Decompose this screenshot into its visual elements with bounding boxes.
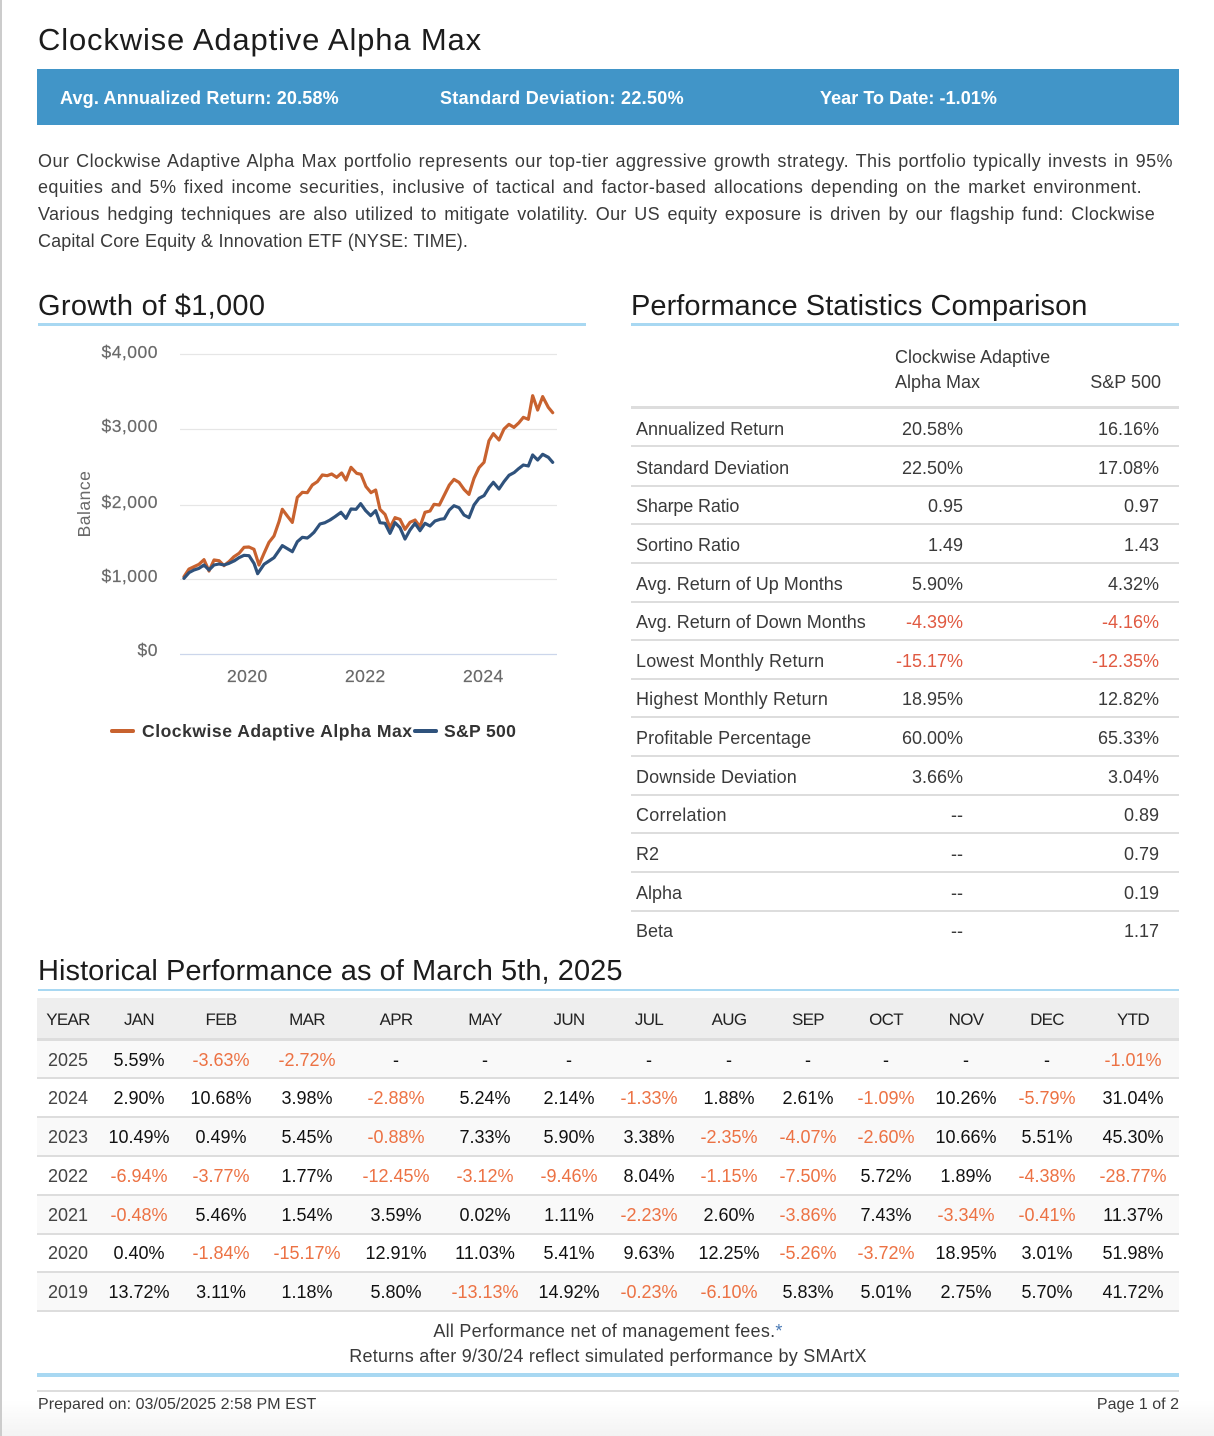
header row: YTD — [1117, 1010, 1149, 1029]
row 2021 — [37, 1196, 1179, 1235]
row 2019: -6.10% — [700, 1282, 758, 1302]
row 2020: 12.91% — [365, 1243, 427, 1263]
row 2025: - — [482, 1050, 488, 1070]
row 2021: -0.41% — [1018, 1205, 1076, 1225]
statistics table: Profitable Percentage — [636, 728, 811, 748]
row 2019: 5.01% — [860, 1282, 912, 1302]
row 2020: 11.03% — [455, 1243, 515, 1263]
statistics table: 1.49 — [928, 535, 963, 555]
summary banner — [37, 69, 1179, 125]
rows: 16.16% — [1098, 419, 1159, 439]
statistics table: 22.50% — [902, 458, 963, 478]
statistics table: Beta — [636, 921, 673, 941]
row 2023: 5.90% — [543, 1127, 595, 1147]
statistics table: 0.79 — [1124, 844, 1159, 864]
row 2025: - — [646, 1050, 652, 1070]
row 2019: 2.75% — [940, 1282, 992, 1302]
row 2020: 12.25% — [698, 1243, 760, 1263]
y-axis labels: $0 — [138, 640, 158, 660]
row 2024: -1.33% — [620, 1088, 678, 1108]
prepared on: Prepared on: 03/05/2025 2:58 PM EST — [38, 1396, 316, 1413]
row 2022: -12.45% — [362, 1166, 430, 1186]
row 2022: 1.89% — [940, 1166, 992, 1186]
row 2023: -2.35% — [700, 1127, 758, 1147]
header row: SEP — [792, 1010, 824, 1029]
row 2025: - — [883, 1050, 889, 1070]
statistics table: Sharpe Ratio — [636, 496, 739, 516]
rows: 20.58% — [902, 419, 963, 439]
row 2024: 3.98% — [281, 1088, 333, 1108]
row 2022: -6.94% — [110, 1166, 168, 1186]
legend: Clockwise Adaptive Alpha Max — [142, 721, 413, 741]
description paragraph: Our Clockwise Adaptive Alpha Max portfolio represents our top-tier aggressive growth strategy. This portfolio typically invests in 95% — [38, 151, 1173, 171]
row 2023: 45.30% — [1102, 1127, 1164, 1147]
row 2019: 14.92% — [538, 1282, 600, 1302]
description paragraph: Various hedging techniques are also utilized to mitigate volatility. Our US equity exposure is driven by our flagship fund: Clockwise — [38, 204, 1155, 224]
header row: APR — [380, 1010, 412, 1029]
row 2024: 10.68% — [190, 1088, 252, 1108]
row 2023: 10.66% — [935, 1127, 997, 1147]
table header: Clockwise Adaptive — [895, 347, 1050, 367]
row 2021: 2.60% — [703, 1205, 755, 1225]
row 2024: -1.09% — [857, 1088, 915, 1108]
heading: growth of $1,000: Growth of $1,000 — [38, 290, 265, 322]
row 2024: 2.90% — [113, 1088, 165, 1108]
statistics table: 0.97 — [1124, 496, 1159, 516]
table header — [631, 340, 1179, 409]
row 2021: 3.59% — [370, 1205, 422, 1225]
line chart: growth of $1,000 — [180, 354, 557, 656]
row 2024: 2024 — [48, 1088, 88, 1108]
row 2020: -1.84% — [192, 1243, 250, 1263]
statistics table: 65.33% — [1098, 728, 1159, 748]
statistics table: -15.17% — [896, 651, 963, 671]
x-axis labels: 2024 — [463, 666, 504, 686]
row 2019: -13.13% — [451, 1282, 519, 1302]
row 2020: 5.41% — [543, 1243, 595, 1263]
row 2023: 3.38% — [623, 1127, 675, 1147]
rows — [631, 410, 1179, 447]
row 2020: 0.40% — [113, 1243, 165, 1263]
row 2024 — [37, 1079, 1179, 1118]
x-axis labels: 2022 — [345, 666, 386, 686]
statistics table: -- — [951, 921, 963, 941]
statistics table: 0.19 — [1124, 883, 1159, 903]
stat: annualized return: Avg. Annualized Return: 20.58% — [60, 88, 339, 108]
statistics table: Avg. Return of Down Months — [636, 612, 866, 632]
footnote: Returns after 9/30/24 reflect simulated performance by SMArtX — [349, 1346, 867, 1366]
statistics table: Alpha — [636, 883, 682, 903]
statistics table: 0.95 — [928, 496, 963, 516]
row 2024: 31.04% — [1102, 1088, 1164, 1108]
row 2023: -2.60% — [857, 1127, 915, 1147]
statistics table: 1.43 — [1124, 535, 1159, 555]
footer shade — [0, 1400, 1214, 1436]
row 2020: -15.17% — [273, 1243, 341, 1263]
footnote — [349, 1321, 867, 1366]
row 2023 — [37, 1118, 1179, 1157]
statistics table: 3.04% — [1108, 767, 1159, 787]
row 2021: -0.48% — [110, 1205, 168, 1225]
description paragraph: equities and 5% fixed income securities, inclusive of tactical and factor-based allocations depending on the market environment. — [38, 177, 1142, 197]
row 2019: -0.23% — [620, 1282, 678, 1302]
y-axis labels — [101, 342, 158, 660]
row 2025: 2025 — [48, 1050, 88, 1070]
row 2025: - — [963, 1050, 969, 1070]
y-axis labels: $2,000 — [101, 492, 158, 512]
row 2023: 0.49% — [195, 1127, 247, 1147]
row 2023: -4.07% — [779, 1127, 837, 1147]
footnote: All Performance net of management fees.* — [433, 1321, 783, 1341]
row 2022: -28.77% — [1099, 1166, 1167, 1186]
series: Clockwise Adaptive Alpha Max — [184, 396, 553, 577]
statistics table: Downside Deviation — [636, 767, 797, 787]
statistics table: Highest Monthly Return — [636, 689, 828, 709]
row 2025: - — [1044, 1050, 1050, 1070]
row 2022: -4.38% — [1018, 1166, 1076, 1186]
rows: Annualized Return — [636, 419, 784, 439]
statistics table: 3.66% — [912, 767, 963, 787]
table header: S&P 500 — [1090, 372, 1161, 392]
row 2022: -3.12% — [456, 1166, 514, 1186]
legend — [110, 721, 516, 741]
description paragraph: Capital Core Equity & Innovation ETF (NYSE: TIME). — [38, 231, 468, 251]
statistics table: -4.16% — [1102, 612, 1159, 632]
y-axis labels: $1,000 — [101, 566, 158, 586]
statistics table: 0.89 — [1124, 805, 1159, 825]
header row: DEC — [1030, 1010, 1064, 1029]
row 2025: - — [805, 1050, 811, 1070]
header row: OCT — [869, 1010, 903, 1029]
title: Clockwise Adaptive Alpha Max — [38, 22, 482, 56]
row 2023: 10.49% — [108, 1127, 170, 1147]
row 2023: -0.88% — [367, 1127, 425, 1147]
row 2019: 13.72% — [108, 1282, 170, 1302]
stat: year to date: Year To Date: -1.01% — [820, 88, 997, 108]
row 2020: -5.26% — [779, 1243, 837, 1263]
header row: FEB — [206, 1010, 236, 1029]
statistics table: -- — [951, 844, 963, 864]
row 2019: 3.11% — [196, 1282, 246, 1302]
row 2020: 2020 — [48, 1243, 88, 1263]
statistics table: 12.82% — [1098, 689, 1159, 709]
header row: AUG — [712, 1010, 746, 1029]
header row: NOV — [949, 1010, 983, 1029]
y-axis labels: $3,000 — [101, 416, 158, 436]
row 2021: 7.43% — [860, 1205, 912, 1225]
legend: S&P 500 — [444, 721, 516, 741]
row 2019: 2019 — [48, 1282, 88, 1302]
row 2023: 7.33% — [459, 1127, 511, 1147]
heading: performance statistics: Performance Statistics Comparison — [631, 290, 1087, 322]
row 2021: -3.34% — [937, 1205, 995, 1225]
row 2023: 5.45% — [281, 1127, 333, 1147]
row 2023: 2023 — [48, 1127, 88, 1147]
row 2021: -3.86% — [779, 1205, 837, 1225]
statistics table: Sortino Ratio — [636, 535, 740, 555]
row 2019: 5.70% — [1021, 1282, 1073, 1302]
statistics table: 18.95% — [902, 689, 963, 709]
statistics table: Avg. Return of Up Months — [636, 574, 843, 594]
row 2022: 5.72% — [860, 1166, 912, 1186]
row 2019: 5.83% — [782, 1282, 834, 1302]
row 2023: 5.51% — [1021, 1127, 1073, 1147]
row 2019 — [37, 1273, 1179, 1312]
header row: MAY — [468, 1010, 502, 1029]
header row: JUL — [635, 1010, 663, 1029]
row 2025: -2.72% — [278, 1050, 336, 1070]
x-axis labels — [227, 666, 504, 686]
heading: historical performance: Historical Performance as of March 5th, 2025 — [38, 955, 623, 987]
header row: JUN — [554, 1010, 584, 1029]
row 2022: 1.77% — [281, 1166, 333, 1186]
row 2021: 2021 — [48, 1205, 88, 1225]
row 2021: -2.23% — [620, 1205, 678, 1225]
header row: JAN — [124, 1010, 154, 1029]
row 2020: 18.95% — [935, 1243, 997, 1263]
row 2022: -1.15% — [700, 1166, 758, 1186]
row 2024: 1.88% — [703, 1088, 755, 1108]
row 2025: - — [393, 1050, 399, 1070]
row 2021: 1.11% — [544, 1205, 594, 1225]
description paragraph — [38, 151, 1173, 251]
statistics table: Standard Deviation — [636, 458, 789, 478]
row 2020: -3.72% — [857, 1243, 915, 1263]
row 2024: 2.61% — [782, 1088, 834, 1108]
row 2025: - — [726, 1050, 732, 1070]
row 2022: -9.46% — [540, 1166, 598, 1186]
statistics table — [631, 347, 1179, 941]
row 2019: 5.80% — [370, 1282, 422, 1302]
row 2025 — [37, 1041, 1179, 1079]
row 2020: 51.98% — [1102, 1243, 1164, 1263]
row 2021: 11.37% — [1103, 1205, 1163, 1225]
row 2020: 3.01% — [1021, 1243, 1073, 1263]
table header: Alpha Max — [895, 372, 980, 392]
stat: standard deviation: Standard Deviation: 22.50% — [440, 88, 684, 108]
row 2025: - — [566, 1050, 572, 1070]
row 2021: 1.54% — [281, 1205, 333, 1225]
row 2019: 1.18% — [281, 1282, 333, 1302]
historical performance table — [37, 998, 1179, 1312]
header row: MAR — [289, 1010, 325, 1029]
statistics table: Correlation — [636, 805, 727, 825]
row 2024: -2.88% — [367, 1088, 425, 1108]
row 2024: -5.79% — [1018, 1088, 1076, 1108]
row 2024: 10.26% — [935, 1088, 997, 1108]
series: S&P 500 — [184, 454, 553, 578]
statistics table: Lowest Monthly Return — [636, 651, 824, 671]
statistics table: R2 — [636, 844, 659, 864]
page edge — [0, 0, 2, 1436]
row 2025: -3.63% — [192, 1050, 250, 1070]
page number: Page 1 of 2 — [1097, 1396, 1179, 1413]
statistics table: 5.90% — [912, 574, 963, 594]
y-axis title: Balance — [74, 471, 94, 537]
statistics table: 60.00% — [902, 728, 963, 748]
row 2022: -7.50% — [779, 1166, 837, 1186]
row 2022: -3.77% — [192, 1166, 250, 1186]
header row — [37, 998, 1179, 1041]
row 2021: 0.02% — [459, 1205, 511, 1225]
statistics table: -12.35% — [1092, 651, 1159, 671]
row 2020 — [37, 1235, 1179, 1273]
row 2025: 5.59% — [113, 1050, 165, 1070]
statistics table: -- — [951, 805, 963, 825]
statistics table: -4.39% — [906, 612, 963, 632]
row 2024: 2.14% — [543, 1088, 595, 1108]
row 2022 — [37, 1157, 1179, 1196]
row 2024: 5.24% — [459, 1088, 511, 1108]
header row: YEAR — [46, 1010, 90, 1029]
x-axis labels: 2020 — [227, 666, 268, 686]
row 2020: 9.63% — [623, 1243, 675, 1263]
statistics table: -- — [951, 883, 963, 903]
statistics table: 17.08% — [1098, 458, 1159, 478]
statistics table: 4.32% — [1108, 574, 1159, 594]
statistics table: 1.17 — [1124, 921, 1159, 941]
row 2021: 5.46% — [195, 1205, 247, 1225]
row 2022: 8.04% — [623, 1166, 675, 1186]
row 2025: -1.01% — [1104, 1050, 1162, 1070]
y-axis labels: $4,000 — [101, 342, 158, 362]
row 2022: 2022 — [48, 1166, 88, 1186]
row 2019: 41.72% — [1102, 1282, 1164, 1302]
